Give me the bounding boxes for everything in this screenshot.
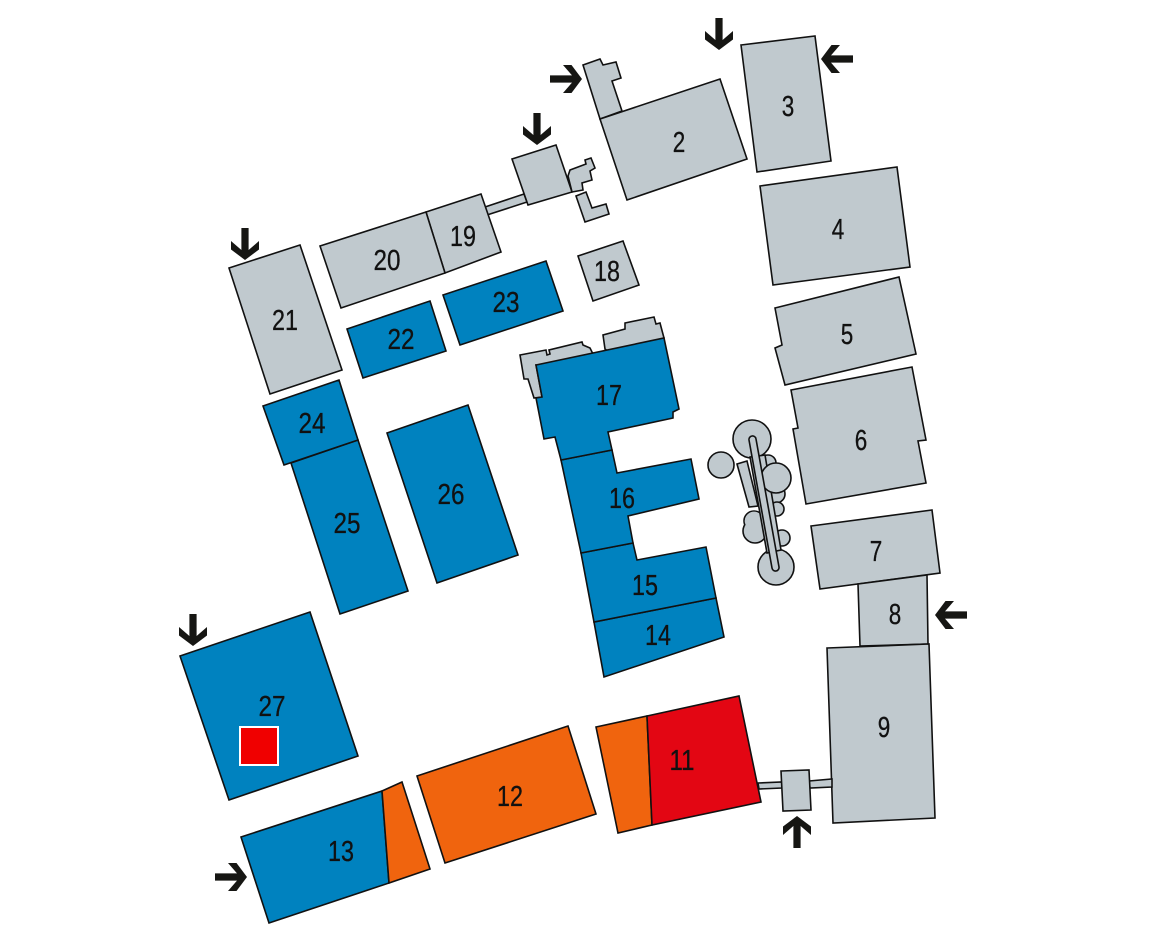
building 17 with annexes — [520, 317, 679, 460]
building 19: 19 — [450, 221, 476, 253]
building 9 — [827, 644, 935, 823]
building 2 — [583, 59, 747, 200]
building 5 — [775, 277, 916, 385]
building 6 — [791, 367, 926, 504]
building 11 — [596, 696, 761, 833]
building 20: 20 — [374, 245, 400, 277]
building 16 — [561, 450, 699, 553]
arrow: down to building 21 — [231, 228, 259, 260]
building 7 — [811, 510, 940, 589]
red location marker — [240, 727, 278, 765]
arrow: right to building 2 annex — [550, 65, 582, 93]
building 21: 21 — [272, 305, 298, 337]
building 2: 2 — [673, 127, 685, 159]
building 12 — [417, 726, 596, 863]
arrow: right to building 13 — [215, 863, 247, 891]
building 4 — [760, 167, 910, 285]
building 19 — [426, 194, 501, 273]
building 20 — [320, 212, 445, 308]
building 16: 16 — [609, 483, 635, 515]
building 9: 9 — [878, 712, 890, 744]
arrow: down to building 27 — [179, 614, 207, 646]
bridge building with connectors — [758, 770, 832, 811]
building 3 — [741, 36, 831, 172]
arrow: up to bridge building — [783, 816, 811, 848]
building 27: 27 — [258, 691, 286, 723]
building 17 with annexes: 17 — [596, 380, 622, 412]
building 11: 11 — [670, 745, 694, 777]
building 27 — [180, 612, 358, 800]
building 13 — [241, 782, 430, 923]
building 24: 24 — [298, 408, 326, 440]
arrow: left to building 3 — [821, 45, 853, 73]
building 18 — [578, 241, 639, 301]
building 3: 3 — [782, 91, 794, 123]
building 14: 14 — [645, 620, 671, 652]
building 22 — [347, 301, 446, 378]
building 15 — [581, 543, 716, 622]
building 6: 6 — [855, 425, 867, 457]
connector and gatehouse — [485, 145, 609, 222]
building 4: 4 — [832, 214, 844, 246]
arrow: down to building 2 — [705, 18, 733, 50]
building 14 — [594, 598, 724, 677]
arrow: down to gatehouse — [523, 113, 551, 145]
building 7: 7 — [870, 536, 882, 568]
park with circular plazas — [708, 420, 794, 585]
building 12: 12 — [497, 781, 523, 813]
building 5: 5 — [841, 319, 853, 351]
building 18: 18 — [594, 256, 620, 288]
building 21 — [229, 245, 342, 394]
building 23 — [443, 261, 563, 345]
building 8 — [858, 575, 928, 646]
building 22: 22 — [388, 324, 414, 356]
building 26 — [387, 405, 518, 583]
building 23: 23 — [492, 287, 520, 319]
building 25: 25 — [334, 508, 360, 540]
arrow: left to building 8 — [935, 601, 967, 629]
building 13: 13 — [328, 836, 354, 868]
building 15: 15 — [632, 570, 658, 602]
building 25 — [291, 440, 408, 614]
building 24 — [263, 380, 358, 465]
building 8: 8 — [889, 599, 901, 631]
building 26: 26 — [438, 479, 464, 511]
